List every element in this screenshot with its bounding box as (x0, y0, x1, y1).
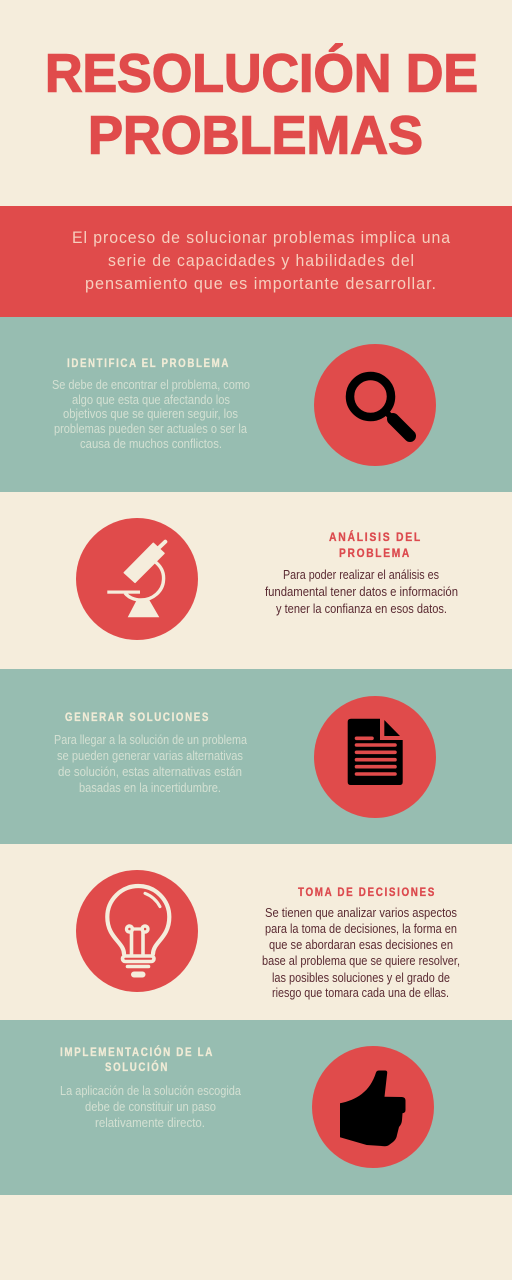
panel: introduction (0, 206, 512, 317)
body text: análisis del problema: Para poder realizar el análisis es (283, 567, 439, 582)
body text: análisis del problema: fundamental tener datos e información (265, 584, 458, 599)
panel: generar soluciones (0, 669, 512, 844)
intro text: El proceso de solucionar problemas implica una (72, 228, 451, 247)
body text: toma de decisiones: base al problema que se quiere resolver, (262, 953, 460, 968)
body text: toma de decisiones: que se abordaran esas decisiones en (269, 937, 453, 952)
heading: análisis del problema (329, 529, 422, 560)
body text: implementación de la solución: relativamente directo. (95, 1115, 205, 1130)
body text: identifica el problema: problemas pueden ser actuales o ser la (54, 421, 248, 436)
heading: implementación de la solución: SOLUCIÓN (105, 1059, 169, 1074)
icon: document (314, 696, 436, 818)
body text: toma de decisiones: riesgo que tomara cada una de ellas. (272, 985, 449, 1000)
body text: identifica el problema: causa de muchos conflictos. (80, 436, 222, 451)
body text: identifica el problema (52, 377, 250, 451)
body text: toma de decisiones (262, 905, 460, 1000)
body text: análisis del problema: y tener la confianza en esos datos. (276, 601, 447, 616)
body text: toma de decisiones: las posibles soluciones y el grado de (272, 970, 450, 985)
body text: identifica el problema: algo que esta que afectando los (72, 392, 230, 407)
panel: implementación de la solución (0, 1020, 512, 1195)
body text: generar soluciones: basadas en la incertidumbre. (79, 780, 221, 795)
body text: análisis del problema (265, 567, 458, 616)
heading: implementación de la solución: IMPLEMENTACIÓN DE LA (60, 1044, 214, 1059)
body text: generar soluciones: Para llegar a la solución de un problema (54, 732, 248, 747)
title: PROBLEMAS (88, 106, 423, 166)
heading: generar soluciones: GENERAR SOLUCIONES (65, 710, 210, 724)
heading: análisis del problema: ANÁLISIS DEL (329, 529, 422, 544)
heading: análisis del problema: PROBLEMA (339, 546, 411, 560)
body text: implementación de la solución: La aplicación de la solución escogida (60, 1083, 242, 1098)
body text: generar soluciones: de solución, estas alternativas están (58, 764, 242, 779)
intro text: pensamiento que es importante desarrollar. (85, 274, 437, 293)
body text: implementación de la solución (60, 1083, 242, 1130)
panel: identifica el problema (0, 317, 512, 492)
icon: microscope (76, 518, 198, 640)
body text: identifica el problema: objetivos que se quieren seguir, los (63, 406, 238, 421)
heading: implementación de la solución (60, 1044, 214, 1074)
body text: implementación de la solución: debe de constituir un paso (85, 1099, 216, 1114)
title: RESOLUCIÓN DE (45, 44, 478, 104)
panel: análisis del problema (0, 492, 512, 669)
title (45, 44, 478, 166)
body text: toma de decisiones: Se tienen que analizar varios aspectos (265, 905, 457, 920)
panel: toma de decisiones (0, 844, 512, 1020)
body text: identifica el problema: Se debe de encontrar el problema, como (52, 377, 250, 392)
icon: thumbs up (312, 1046, 434, 1168)
icon: light bulb (76, 870, 198, 992)
heading: toma de decisiones: TOMA DE DECISIONES (298, 885, 436, 899)
body text: toma de decisiones: para la toma de decisiones, la forma en (265, 921, 457, 936)
intro text (72, 228, 451, 293)
body text: generar soluciones: se pueden generar varias alternativas (57, 748, 243, 763)
heading: identifica el problema: IDENTIFICA EL PROBLEMA (67, 356, 230, 370)
intro text: serie de capacidades y habilidades del (108, 251, 415, 270)
icon: magnifying glass (314, 344, 436, 466)
body text: generar soluciones (54, 732, 248, 795)
